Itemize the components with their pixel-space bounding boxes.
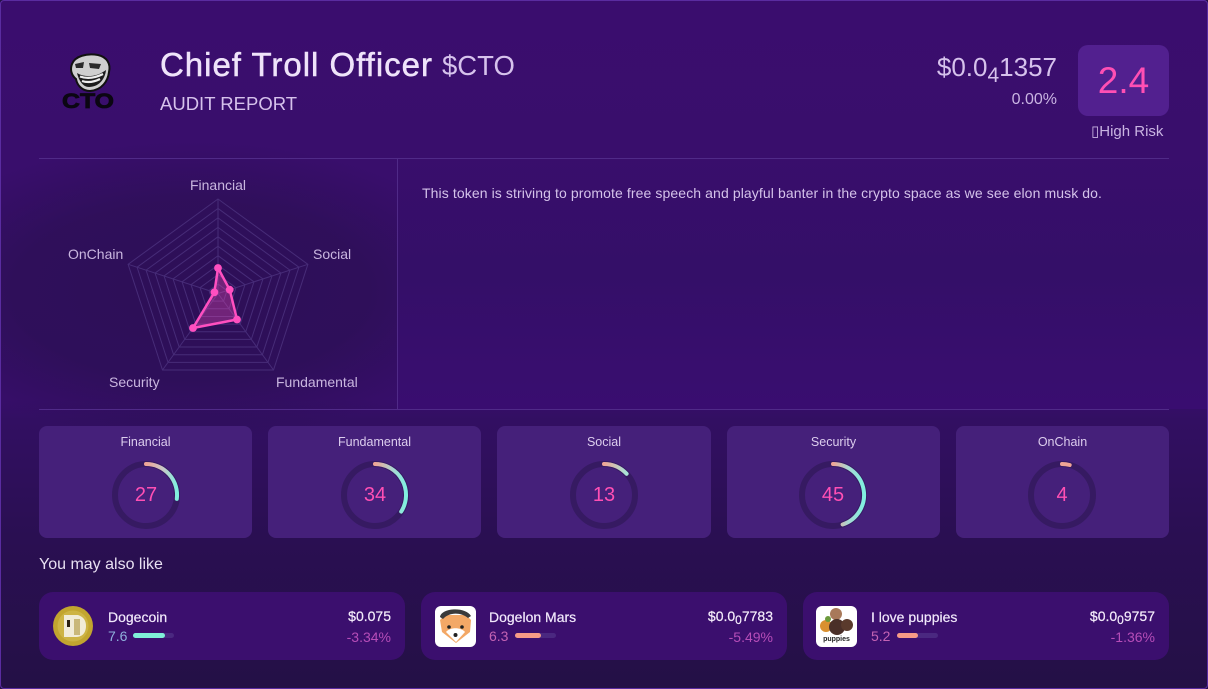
radar data polygon (189, 264, 241, 332)
radar axis labels: Social (313, 246, 351, 262)
risk label: ▯High Risk (1091, 123, 1163, 140)
gauge (112, 461, 180, 529)
change: -1.36% (1111, 629, 1155, 645)
radar axis labels (68, 177, 358, 390)
token card: Dogelon Mars (421, 592, 787, 660)
icon: puppies: puppies (823, 636, 850, 643)
gauge: 34 (364, 484, 386, 506)
icon: puppies (816, 606, 857, 647)
name: I love puppies (871, 609, 957, 625)
price: $0.009757 (1090, 608, 1155, 627)
price: $0.075 (348, 608, 391, 624)
panel: OnChain score (956, 426, 1169, 538)
radar axis labels: OnChain (68, 246, 123, 262)
panel: Fundamental score (268, 426, 481, 538)
icon: dogecoin (53, 606, 93, 646)
radar axis labels: Fundamental (276, 374, 358, 390)
radar axis labels: Security (109, 374, 160, 390)
icon: CTO troll logo (62, 53, 114, 113)
score bar (133, 633, 174, 638)
score: 6.3 (489, 628, 508, 644)
name: Dogelon Mars (489, 609, 576, 625)
ticker: $CTO (442, 50, 515, 81)
token card: I love puppies (803, 592, 1169, 660)
label: Financial (120, 435, 171, 449)
price: $0.041357 (937, 52, 1057, 87)
gauge: 27 (135, 484, 157, 506)
label: Social (587, 435, 621, 449)
icon: CTO troll logo: CTO (62, 90, 114, 113)
change: -5.49% (729, 629, 773, 645)
icon: dogelon (435, 606, 476, 647)
price change: 0.00% (1012, 91, 1057, 108)
panel: Social score (497, 426, 711, 538)
subtitle: AUDIT REPORT (160, 93, 297, 114)
gauge: 45 (822, 484, 844, 506)
panel: Financial score (39, 426, 252, 538)
gauge (341, 461, 409, 529)
score bar (515, 633, 556, 638)
score: 5.2 (871, 628, 890, 644)
risk score box (1078, 45, 1169, 116)
description text: This token is striving to promote free speech and playful banter in the crypto space as we see elon musk do. (422, 185, 1102, 201)
radar chart (68, 177, 358, 390)
gauge: 13 (593, 484, 615, 506)
radar axis labels: Financial (190, 177, 246, 193)
token card: Dogecoin (39, 592, 405, 660)
price: $0.007783 (708, 608, 773, 627)
title: Chief Troll Officer (160, 46, 433, 83)
name: Dogecoin (108, 609, 167, 625)
label: OnChain (1038, 435, 1087, 449)
score bar (897, 633, 938, 638)
gauge: 4 (1056, 484, 1068, 506)
gauge (799, 461, 867, 529)
section heading: You may also like (39, 556, 163, 573)
label: Fundamental (338, 435, 411, 449)
gauge (1028, 461, 1096, 529)
gauge (570, 461, 638, 529)
risk score box: 2.4 (1098, 60, 1149, 101)
change: -3.34% (347, 629, 391, 645)
panel: Security score (727, 426, 940, 538)
label: Security (811, 435, 856, 449)
score: 7.6 (108, 628, 127, 644)
